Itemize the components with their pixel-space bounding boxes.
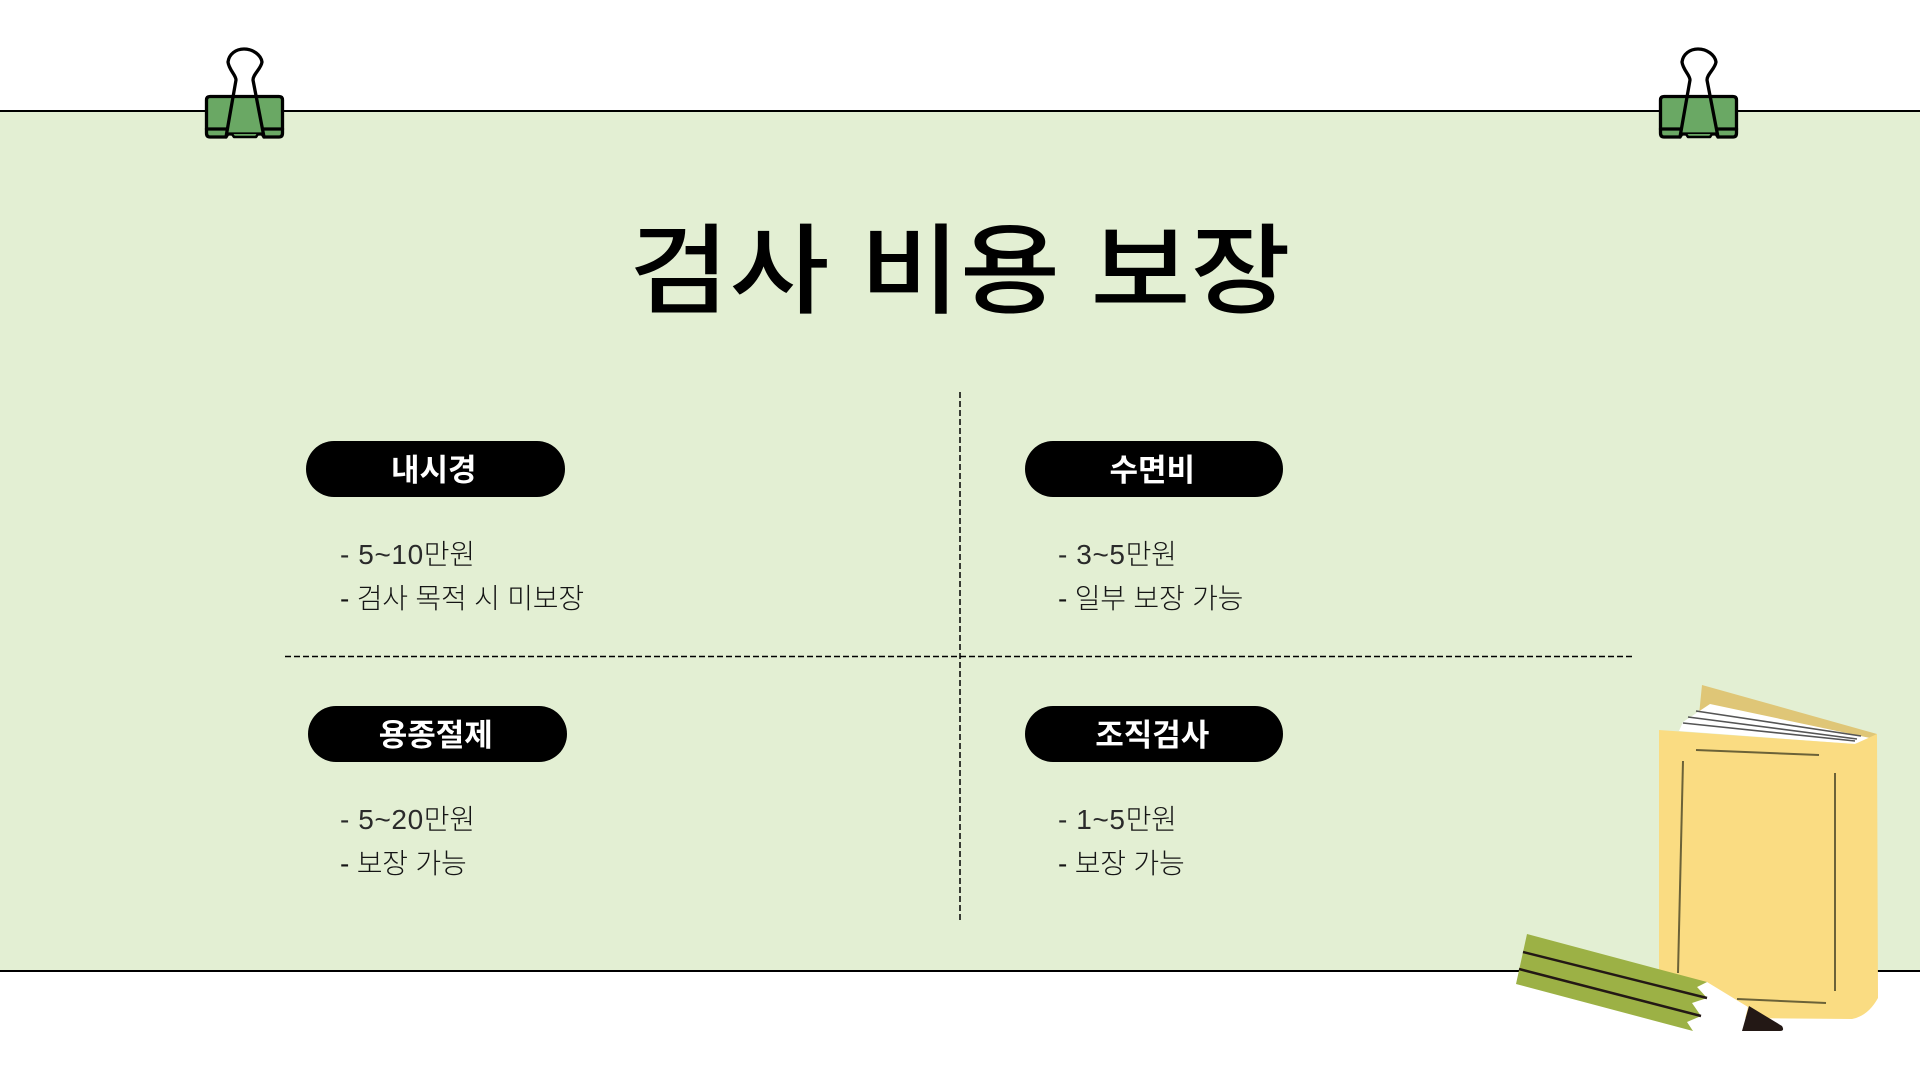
icon: pencil [1516, 934, 1783, 1031]
text block: 조직검사 costs: - 보장 가능 [1058, 848, 1185, 879]
label pill: 내시경: 내시경 [391, 445, 477, 490]
panel: 조직검사 [1025, 706, 1283, 879]
text block: 용종절제 costs: - 보장 가능 [340, 848, 467, 879]
panel: 용종절제 [308, 706, 567, 879]
text block: 용종절제 costs [340, 804, 475, 879]
green background band [0, 110, 1920, 972]
text block: 수면비 costs: - 일부 보장 가능 [1058, 583, 1243, 614]
label pill: 수면비 [1024, 441, 1283, 497]
text block: 수면비 costs: - 3~5만원 [1058, 539, 1177, 570]
text block: 조직검사 costs: - 1~5만원 [1058, 804, 1177, 835]
text block: 용종절제 costs: - 5~20만원 [340, 804, 475, 835]
label pill: 수면비: 수면비 [1109, 445, 1195, 490]
title: 검사 비용 보장 [629, 192, 1291, 334]
label pill: 내시경 [306, 441, 564, 497]
label pill: 조직검사: 조직검사 [1095, 710, 1209, 755]
label pill: 용종절제: 용종절제 [379, 710, 493, 755]
panel: 수면비 [1025, 441, 1283, 614]
icon: binder clip right [1660, 49, 1736, 137]
icon: book [1659, 685, 1878, 1019]
text block: 내시경 costs: - 검사 목적 시 미보장 [340, 583, 584, 614]
text block: 내시경 costs: - 5~10만원 [340, 539, 475, 570]
text block: 수면비 costs [1058, 539, 1243, 614]
icon: binder clip left [206, 49, 282, 137]
label pill: 조직검사 [1024, 706, 1283, 762]
text block: 조직검사 costs [1058, 804, 1185, 879]
label pill: 용종절제 [308, 706, 566, 762]
text block: 내시경 costs [340, 539, 584, 614]
panel: 내시경 [306, 441, 584, 614]
